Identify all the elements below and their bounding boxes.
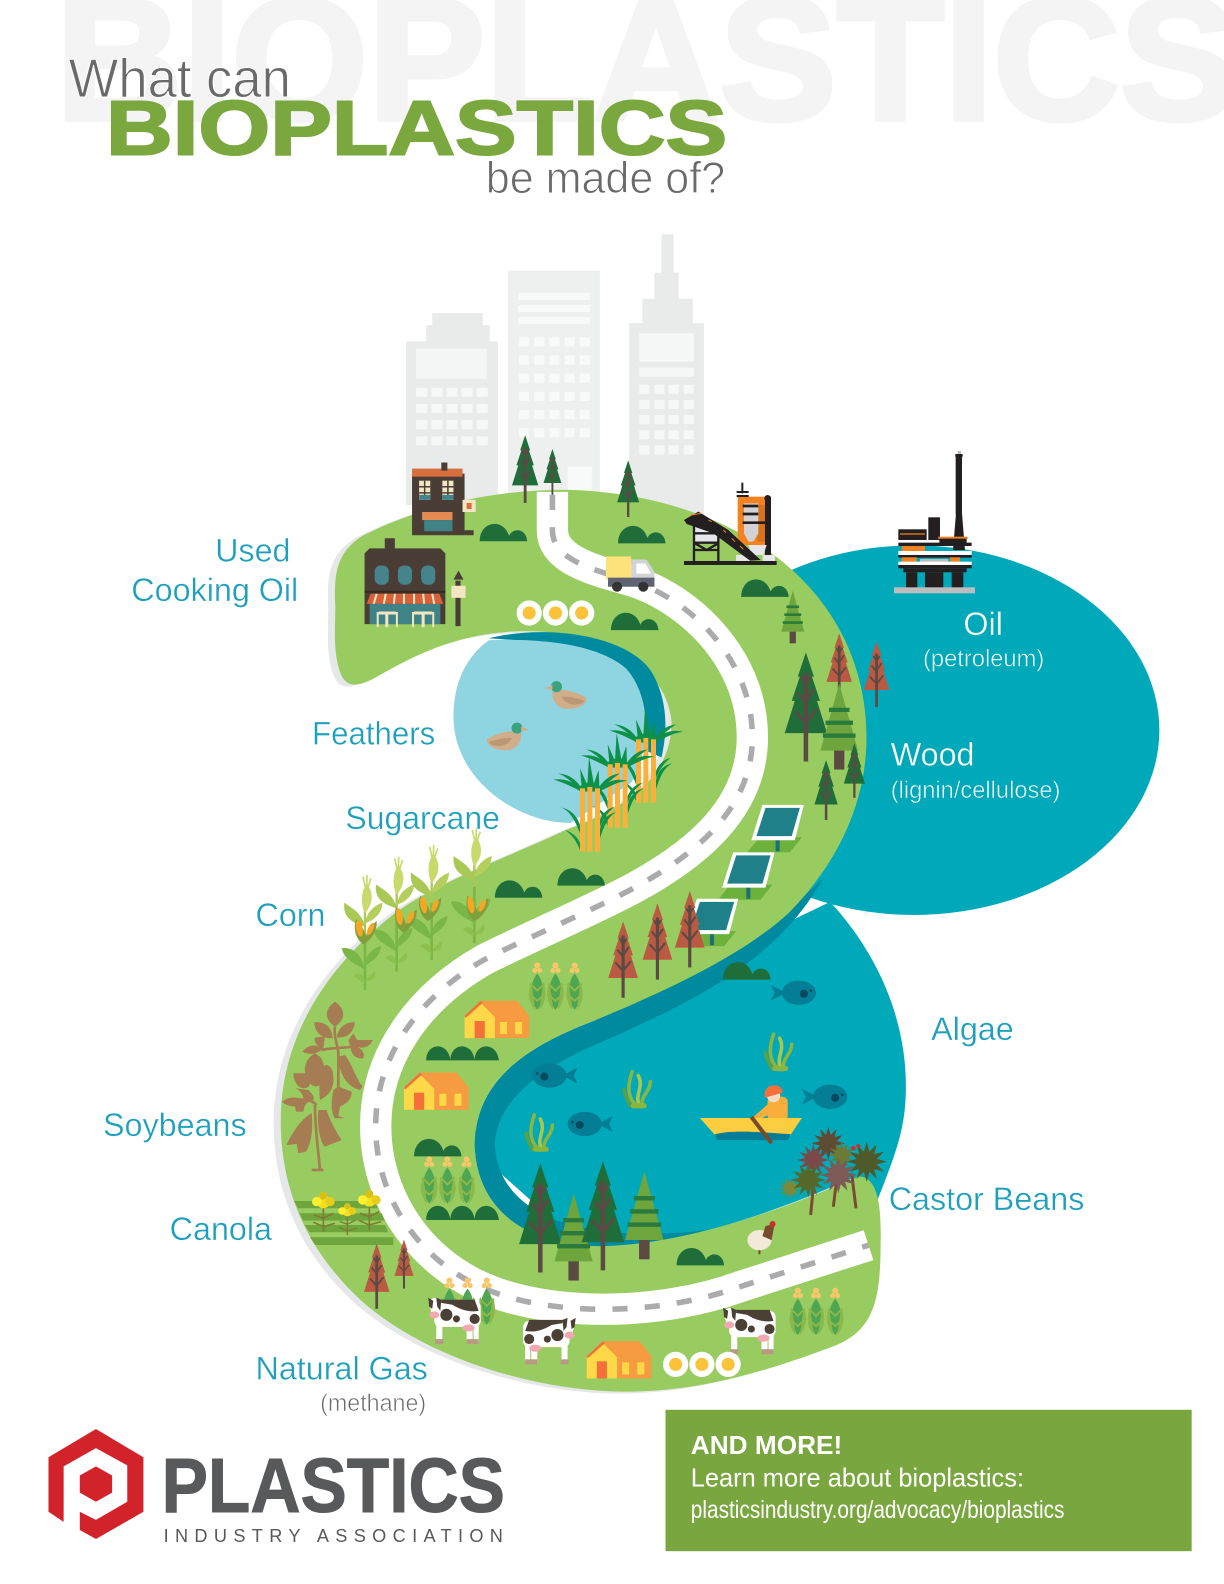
label: algae: Algae	[931, 1011, 1014, 1047]
label: methane: (methane)	[320, 1390, 426, 1417]
tree	[512, 435, 538, 503]
corn	[421, 1156, 475, 1204]
and more: AND MORE!	[691, 1430, 842, 1460]
oil rig	[894, 451, 975, 593]
title line 1: What can	[69, 48, 291, 109]
bush	[611, 613, 658, 630]
pine	[625, 1171, 664, 1259]
dark tree	[844, 743, 865, 798]
fish	[532, 981, 847, 1136]
soybean plant	[282, 1002, 373, 1170]
city skyline	[406, 234, 704, 515]
cow	[723, 1308, 776, 1354]
flower	[358, 1190, 381, 1230]
dark tree	[814, 760, 838, 820]
maize	[342, 875, 382, 990]
tree	[544, 449, 561, 495]
bush	[723, 962, 771, 980]
label: corn: Corn	[256, 897, 326, 933]
house	[465, 1001, 529, 1038]
refinery	[684, 483, 777, 565]
houses	[404, 1001, 651, 1378]
algae lake	[465, 902, 906, 1267]
label: oil: Oil	[963, 606, 1003, 642]
label: canola: Canola	[170, 1211, 272, 1247]
eggs	[663, 1352, 741, 1377]
corn	[790, 1288, 843, 1335]
corn plants	[342, 828, 492, 990]
red tree	[394, 1240, 414, 1289]
red tree	[826, 633, 852, 699]
forest right	[781, 591, 889, 820]
label: castor beans: Castor Beans	[889, 1181, 1084, 1217]
bush	[426, 1046, 499, 1060]
red trees lower	[364, 1240, 414, 1309]
bush	[557, 868, 605, 886]
house	[404, 1072, 469, 1110]
title	[69, 48, 727, 203]
bush	[480, 524, 527, 541]
maize	[451, 828, 492, 943]
call to action box	[666, 1410, 1192, 1551]
panel	[718, 852, 775, 900]
leaf cluster	[812, 1127, 845, 1160]
fish	[802, 1085, 847, 1109]
fish	[771, 981, 816, 1005]
url: plasticsindustry.org/advocacy/bioplastics	[691, 1496, 1064, 1524]
red tree	[364, 1243, 389, 1309]
pond water	[453, 640, 646, 823]
shop: café building	[365, 538, 445, 627]
cane clump	[581, 733, 655, 828]
road	[376, 492, 869, 1309]
cow	[428, 1298, 481, 1344]
seaweed	[526, 1115, 552, 1149]
label: soybeans: Soybeans	[103, 1107, 247, 1143]
pine	[781, 591, 804, 643]
algae lake rim	[475, 879, 823, 1247]
ears	[355, 919, 377, 944]
land: S-shaped ground	[281, 490, 881, 1392]
bush	[414, 1139, 462, 1156]
road dashes	[376, 495, 869, 1309]
red tree	[864, 641, 889, 707]
logo mark	[48, 1429, 143, 1539]
bushes	[414, 524, 789, 1265]
bush	[677, 1248, 724, 1265]
label: lignin/cellulose: (lignin/cellulose)	[891, 777, 1060, 804]
panel	[682, 899, 738, 946]
cane clump	[553, 757, 627, 852]
cane clump	[609, 708, 683, 803]
leaf cluster	[828, 1142, 855, 1168]
red tree	[608, 921, 638, 998]
lamp post	[451, 571, 466, 626]
leaf cluster	[820, 1157, 857, 1193]
road surface	[376, 492, 869, 1309]
truck	[606, 556, 654, 592]
leaf cluster	[797, 1144, 829, 1176]
fish	[568, 1112, 613, 1136]
labels	[103, 532, 1084, 1417]
logo	[48, 1429, 505, 1546]
red tree	[643, 903, 672, 980]
fish	[532, 1063, 578, 1088]
leaf cluster	[791, 1162, 826, 1197]
land shadow	[274, 492, 874, 1394]
label: petroleum: (petroleum)	[923, 646, 1044, 673]
oil lake	[669, 545, 1159, 915]
tree	[617, 460, 639, 517]
learn more: Learn more about bioplastics:	[691, 1463, 1024, 1493]
label: used cooking oil: Cooking Oil	[131, 572, 298, 608]
bush	[741, 579, 789, 597]
cows	[428, 1298, 776, 1364]
corn	[529, 962, 583, 1010]
corn rows	[421, 962, 843, 1335]
boat with rower	[700, 1085, 802, 1143]
right building	[629, 234, 704, 515]
left building	[406, 313, 498, 505]
cow	[523, 1318, 576, 1364]
corn	[441, 1278, 495, 1325]
label: wood: Wood	[891, 736, 975, 772]
pond rim	[489, 632, 665, 757]
seaweed	[766, 1034, 792, 1068]
dark tree	[519, 1163, 562, 1272]
sugarcane	[553, 708, 683, 852]
leaf cluster	[847, 1142, 887, 1182]
title line 3: be made of?	[486, 154, 725, 203]
maize	[373, 857, 414, 972]
bush	[495, 880, 542, 898]
red tree	[675, 891, 705, 967]
trees at horizon	[512, 435, 639, 517]
label: sugarcane: Sugarcane	[345, 800, 500, 836]
duck	[487, 723, 529, 750]
logo tagline: INDUSTRY ASSOCIATION	[164, 1526, 503, 1546]
house	[587, 1341, 651, 1378]
eggs	[517, 600, 594, 626]
flower	[312, 1192, 335, 1232]
dark tree	[582, 1161, 624, 1270]
ears	[466, 896, 488, 921]
label: feathers: Feathers	[312, 715, 435, 751]
solar panels	[682, 805, 804, 946]
lake trees	[519, 1161, 664, 1281]
maize	[408, 845, 449, 960]
title main word: BIOPLASTICS	[106, 87, 727, 172]
ears	[419, 896, 441, 921]
duck	[544, 681, 587, 709]
algae	[526, 1034, 792, 1149]
label: used cooking oil: Used	[215, 532, 291, 568]
castor bean plants	[779, 1127, 887, 1215]
logo word: PLASTICS	[162, 1444, 505, 1529]
pine	[820, 684, 858, 770]
pine	[555, 1194, 593, 1281]
shop: red roof building	[412, 463, 476, 535]
canola field	[294, 1190, 393, 1245]
red trees centre	[608, 891, 705, 998]
seaweed	[624, 1071, 650, 1106]
middle building	[508, 271, 600, 498]
panel	[747, 805, 804, 852]
bush	[426, 1206, 499, 1220]
ears	[395, 907, 417, 933]
pond	[453, 632, 665, 823]
leaf cluster	[779, 1177, 801, 1199]
label: natural gas: Natural Gas	[256, 1350, 428, 1386]
bush	[618, 526, 666, 543]
ducks	[487, 681, 587, 750]
chicken	[747, 1221, 776, 1254]
dark tree	[785, 652, 827, 761]
flower	[338, 1203, 357, 1235]
